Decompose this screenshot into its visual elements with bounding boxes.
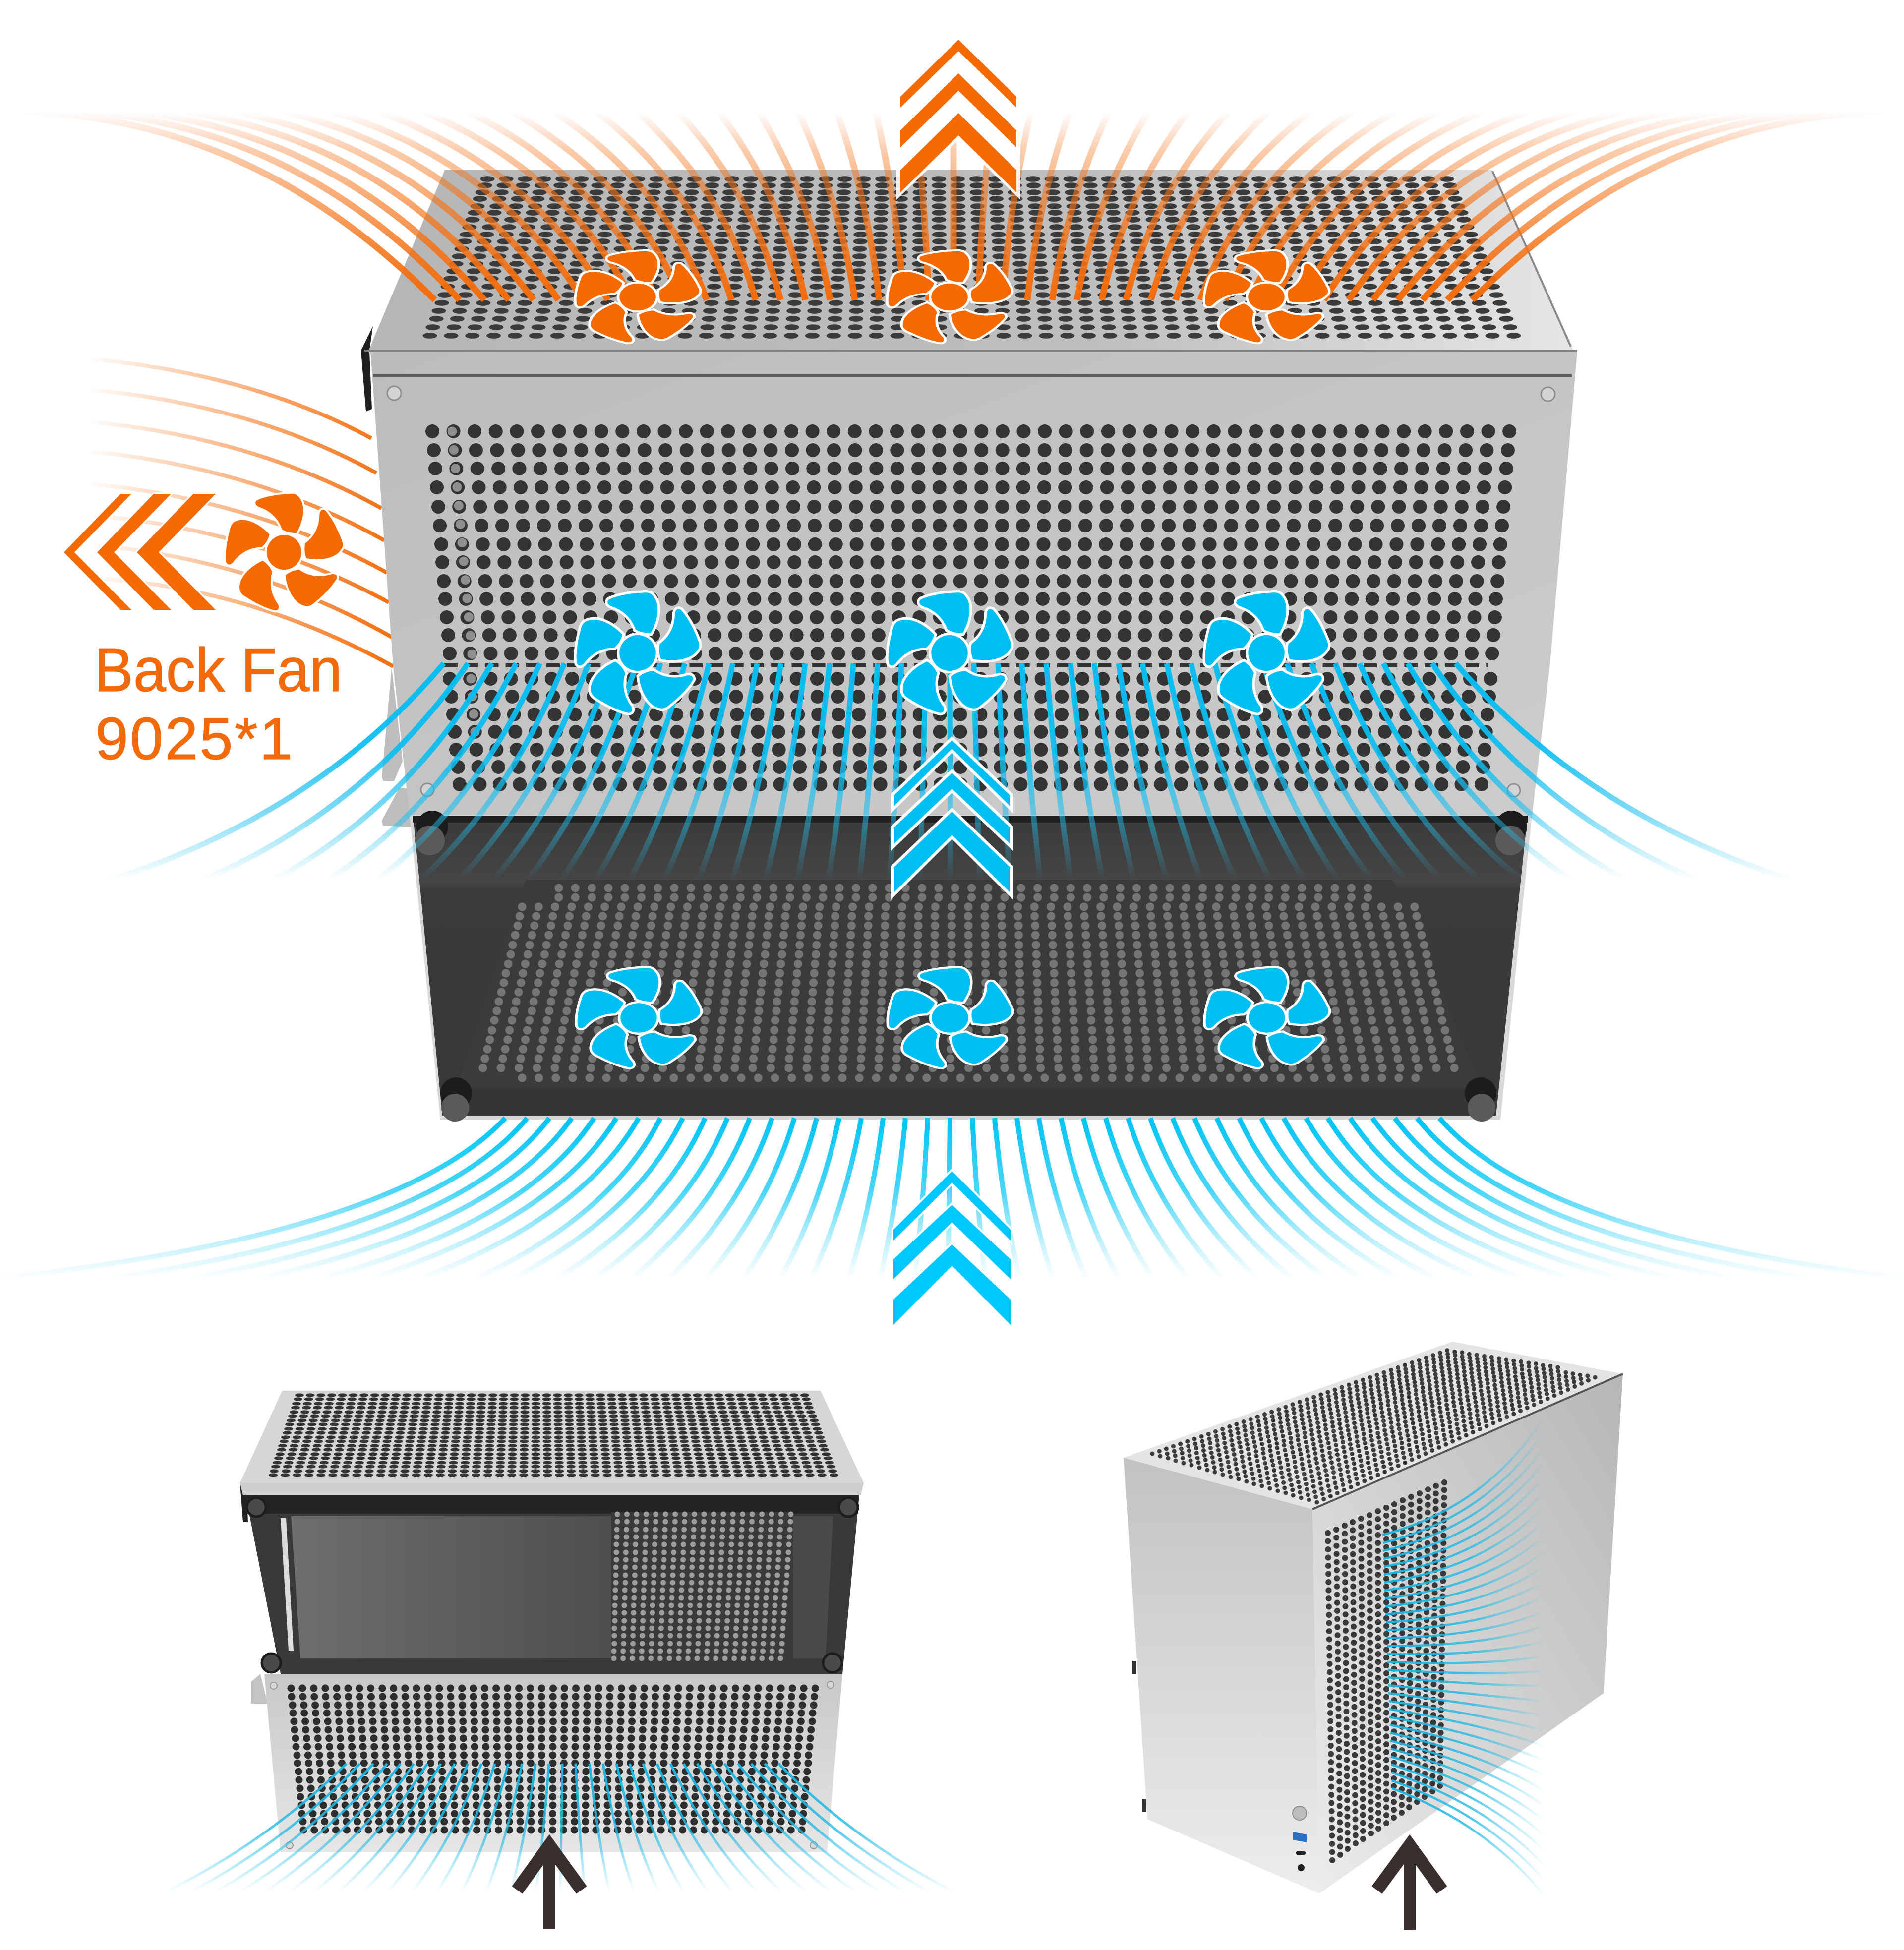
- lower right: front ports: [1293, 1806, 1307, 1871]
- icons: floor intake fans: [571, 968, 1332, 1072]
- intake airflow lines through front panel: [110, 663, 1792, 880]
- inner floor perforation: [483, 888, 1456, 1078]
- front panel holes: [432, 431, 1511, 784]
- intake airflow lines below case: [0, 1118, 1904, 1278]
- back fan label: [94, 636, 342, 772]
- main case: side flanges: [382, 667, 412, 827]
- lower right: top plate: [1124, 1342, 1623, 1509]
- icons: front intake fans: [570, 592, 1331, 719]
- arrow: blue intake chevrons over case: [894, 740, 1010, 892]
- arrow: lower left dark arrow: [517, 1844, 582, 1929]
- lower left: band: [240, 1483, 864, 1495]
- back fan label: 9025*1: [95, 706, 293, 772]
- lower left: window mesh: [614, 1514, 792, 1658]
- panel screws: [387, 386, 1555, 797]
- lower left: perforated panel: [264, 1674, 842, 1852]
- back fan label: Back Fan: [94, 636, 342, 705]
- main case: dark acrylic window with inner floor: [410, 811, 1532, 1122]
- lower left view: window-side case: [240, 1391, 864, 1852]
- window thumbscrews: [415, 811, 1527, 1122]
- lower left: dark window: [245, 1495, 859, 1674]
- arrow: blue intake chevrons below case: [893, 1171, 1011, 1325]
- main case: front perforated panel: [364, 350, 1577, 816]
- lower right: left face: [1124, 1458, 1319, 1893]
- arrow: orange exhaust chevrons up: [896, 36, 1020, 200]
- lower left view: airflow lines: [165, 1764, 955, 1892]
- lower left: top plate: [240, 1391, 864, 1483]
- main case: rear black bracket: [361, 326, 373, 412]
- main case: top plate: [368, 170, 1574, 352]
- back fan airflow lines: [91, 359, 393, 666]
- lower right: side perforation: [1328, 1482, 1444, 1862]
- lower right view: airflow lines: [1382, 1416, 1545, 1896]
- exhaust airflow lines through top plate: [24, 112, 1881, 300]
- icons: top exhaust fans: [570, 251, 1331, 347]
- lower right view: tower case: [1124, 1342, 1623, 1893]
- icon: back fan: [220, 494, 346, 617]
- arrow: orange back exhaust chevrons: [64, 494, 216, 610]
- lower right: right face: [1312, 1374, 1623, 1893]
- top plate perforation: [430, 179, 1515, 336]
- arrow: lower right dark arrow: [1377, 1845, 1442, 1930]
